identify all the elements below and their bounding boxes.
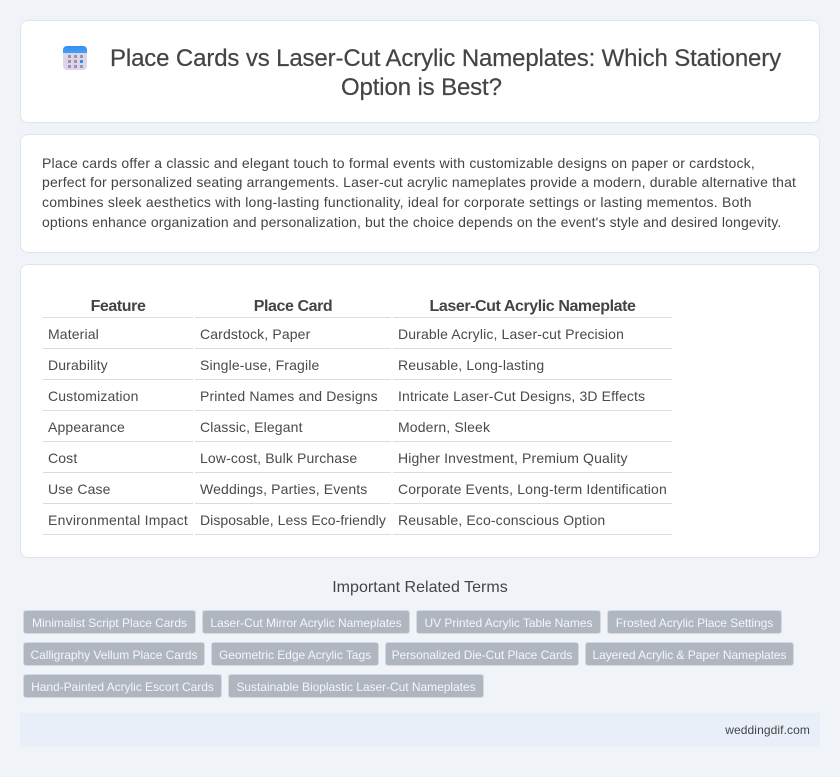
tags: related terms: Laser-Cut Mirror Acrylic Nameplates (210, 616, 402, 630)
comparison table: Durability (48, 357, 108, 373)
tags: related terms: Minimalist Script Place Cards (32, 616, 187, 630)
comparison table: Weddings, Parties, Events (200, 481, 367, 497)
icon: calendar (63, 46, 87, 70)
title: Place Cards vs Laser-Cut Acrylic Nameplates: Which Stationery (110, 45, 781, 72)
tags: related terms: UV Printed Acrylic Table Names (424, 616, 592, 630)
comparison table: Place Card (254, 298, 332, 315)
footer (20, 713, 820, 747)
comparison table: Feature (91, 298, 145, 315)
comparison table: Laser-Cut Acrylic Nameplate (430, 298, 635, 315)
panel: comparison table (20, 264, 820, 558)
text block: description: perfect for personalized seating arrangements. Laser-cut acrylic nameplates provide a modern, durable alternative that (42, 174, 796, 190)
text block: description: combines sleek aesthetics with long-lasting functionality, ideal for corporate settings or lasting mementos. Both (42, 194, 752, 210)
comparison table: Use Case (48, 481, 111, 497)
title (110, 45, 782, 101)
tags: related terms: Geometric Edge Acrylic Tags (219, 648, 371, 662)
comparison table: Environmental Impact (48, 512, 188, 528)
comparison table: Appearance (48, 419, 125, 435)
comparison table: Reusable, Long-lasting (398, 357, 544, 373)
heading: related terms: Important Related Terms (332, 579, 508, 596)
tags: related terms: Frosted Acrylic Place Settings (616, 616, 773, 630)
comparison table: Low-cost, Bulk Purchase (200, 450, 357, 466)
comparison table: Cardstock, Paper (200, 326, 310, 342)
tags: related terms: Calligraphy Vellum Place Cards (31, 648, 197, 662)
tags: related terms: Personalized Die-Cut Place Cards (392, 648, 572, 662)
comparison table: Reusable, Eco-conscious Option (398, 512, 605, 528)
comparison table: Material (48, 326, 99, 342)
comparison table: Corporate Events, Long-term Identification (398, 481, 667, 497)
comparison table: Intricate Laser-Cut Designs, 3D Effects (398, 388, 645, 404)
comparison table: Classic, Elegant (200, 419, 303, 435)
text block: description (42, 155, 796, 230)
comparison table (43, 298, 672, 535)
comparison table: Printed Names and Designs (200, 388, 378, 404)
panel: title (20, 20, 820, 123)
tags: related terms: Hand-Painted Acrylic Escort Cards (31, 680, 214, 694)
tags: related terms (23, 610, 794, 698)
comparison table: Durable Acrylic, Laser-cut Precision (398, 326, 624, 342)
title: Option is Best? (341, 74, 502, 101)
tags: related terms: Sustainable Bioplastic Laser-Cut Nameplates (236, 680, 476, 694)
panel: description (20, 134, 820, 253)
comparison table: Disposable, Less Eco-friendly (200, 512, 386, 528)
comparison table: Higher Investment, Premium Quality (398, 450, 628, 466)
footer source text: weddingdif.com (725, 723, 810, 737)
tags: related terms: Layered Acrylic & Paper Nameplates (592, 648, 787, 662)
text block: description: Place cards offer a classic and elegant touch to formal events with customizable designs on paper or cardstock, (42, 155, 755, 171)
text block: description: options enhance organization and personalization, but the choice depends on the event's style and desired longevity. (42, 214, 781, 230)
comparison table: Cost (48, 450, 77, 466)
comparison table: Single-use, Fragile (200, 357, 319, 373)
comparison table: Modern, Sleek (398, 419, 490, 435)
comparison table: Customization (48, 388, 139, 404)
